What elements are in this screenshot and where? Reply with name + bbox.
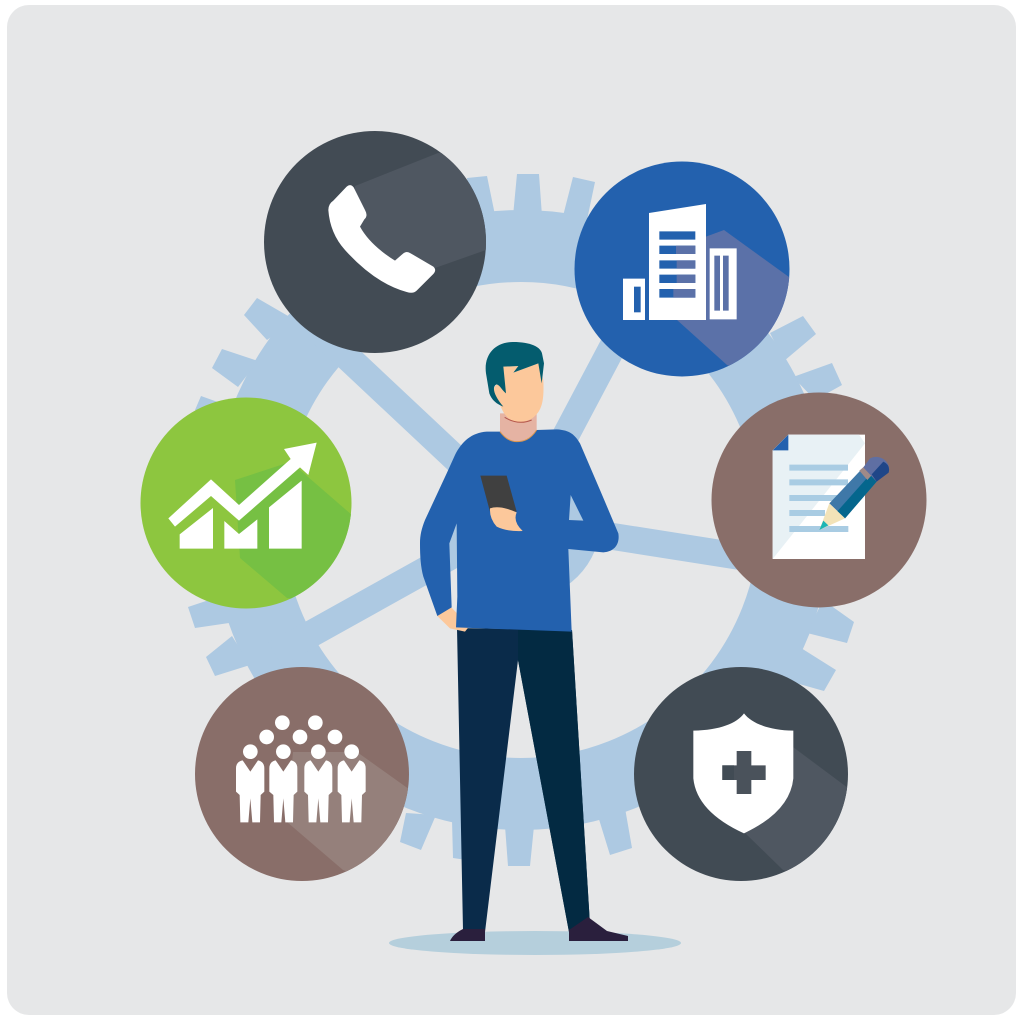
icon: group of business people — [236, 715, 366, 822]
holding hand — [490, 507, 523, 531]
ground shadow — [389, 931, 681, 955]
person 1 — [236, 744, 264, 822]
icon: shield with cross — [693, 713, 793, 833]
person 2 — [269, 744, 297, 822]
face — [494, 363, 544, 422]
icon circle: growth chart — [140, 398, 360, 610]
smartphone — [480, 476, 517, 512]
neck — [500, 413, 537, 445]
icon circle: health shield — [634, 667, 860, 890]
sweater — [420, 429, 619, 632]
icon: rising chart with arrow — [168, 443, 317, 549]
icon: phone handset — [328, 185, 435, 293]
hair — [486, 342, 544, 407]
icon circle: buildings — [574, 162, 790, 376]
trousers — [457, 628, 590, 932]
person 4 — [338, 744, 366, 822]
icon circle: document and pencil — [712, 392, 926, 608]
person 3 — [304, 744, 332, 822]
icon circle: team of people — [195, 667, 409, 881]
man with smartphone — [420, 342, 628, 941]
icon: document with pencil — [773, 435, 889, 559]
icon: office buildings — [623, 204, 737, 320]
shoes — [450, 917, 628, 941]
hand on hip — [437, 606, 469, 632]
icon circle: phone — [264, 131, 486, 353]
collar — [500, 430, 537, 442]
gear wheel — [188, 174, 854, 866]
